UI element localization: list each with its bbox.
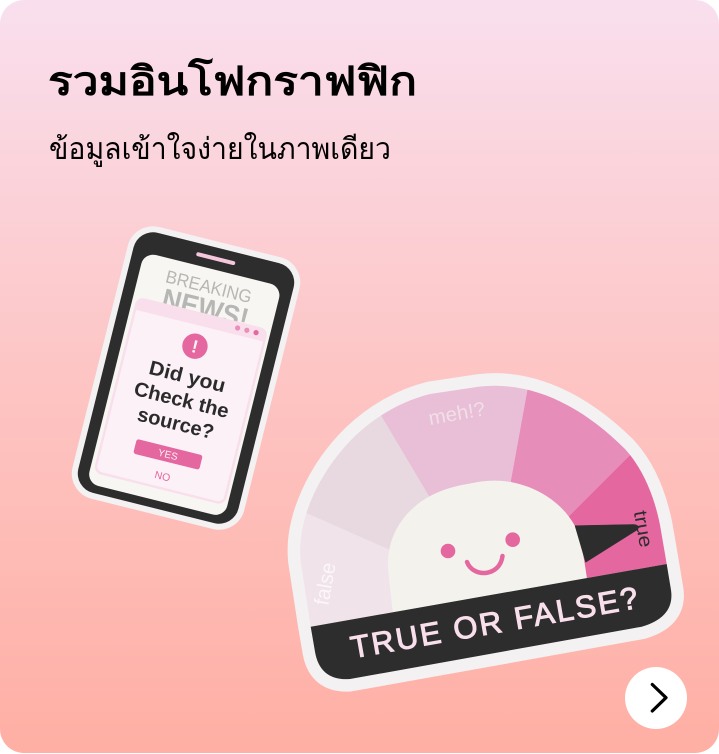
question text: Did you (147, 357, 228, 397)
breaking news headline: NEWS! (159, 283, 252, 336)
next button (625, 667, 687, 729)
band text: TRUE OR FALSE? (348, 580, 641, 665)
phone screen (87, 252, 282, 517)
label: true: true (629, 509, 656, 549)
icon: phone sticker (74, 228, 298, 528)
breaking news headline: BREAKING (164, 266, 254, 307)
icon: alert (180, 331, 210, 362)
title band (311, 564, 671, 679)
label: meh: meh!? (427, 398, 487, 430)
popup window (94, 297, 268, 504)
label: false: false (311, 561, 341, 607)
breaking news headline (163, 270, 251, 322)
face: smile (467, 556, 502, 573)
yes button: YES (157, 448, 179, 463)
yes button (133, 439, 203, 470)
face: eyes (441, 532, 520, 558)
gauge sticker (280, 370, 700, 679)
question text (126, 355, 237, 446)
question text: source? (135, 404, 216, 444)
gauge face (388, 481, 592, 620)
no option: NO (153, 469, 172, 484)
gauge segments (300, 386, 667, 626)
icon: chevron (652, 684, 666, 711)
title: รวมอินโฟกราฟฟิก (48, 58, 417, 104)
phone body (74, 228, 298, 528)
question text: Check the (132, 378, 231, 423)
subtitle: ข้อมูลเข้าใจง่ายในภาพเดียว (49, 132, 391, 167)
popup title bar (134, 297, 268, 342)
sticker outline (300, 386, 671, 679)
gauge needle (575, 524, 638, 562)
phone speaker (196, 252, 236, 265)
icon: alert: ! (190, 336, 200, 357)
window dots (234, 325, 259, 336)
